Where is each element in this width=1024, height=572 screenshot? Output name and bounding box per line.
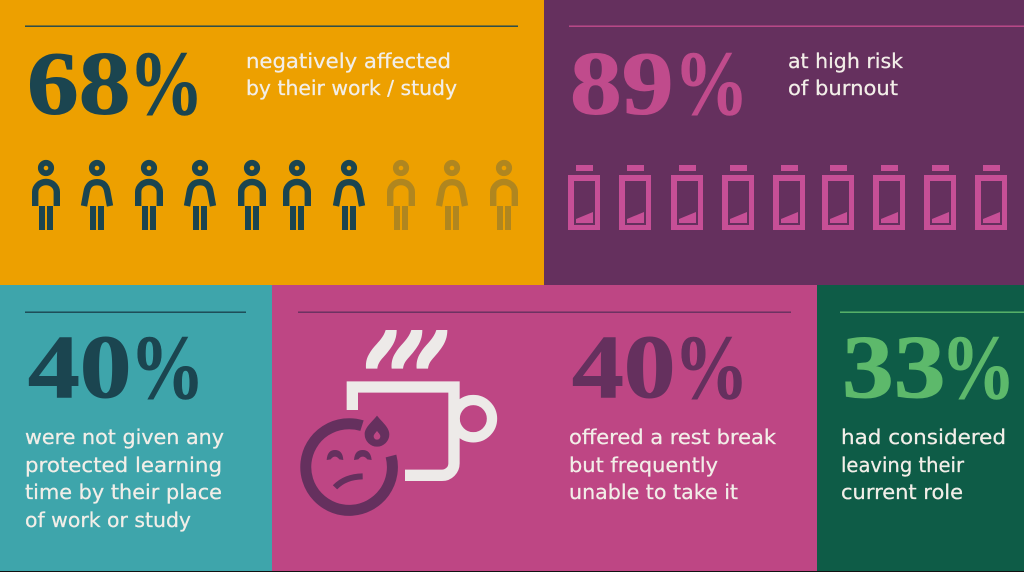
icon: steam xyxy=(366,330,447,369)
text: had considered leaving xyxy=(841,425,1006,504)
panel: 68% negatively affected xyxy=(0,0,544,285)
text: offered a rest break: offered a rest break xyxy=(569,425,776,449)
text: had considered leaving: had considered xyxy=(841,425,1006,449)
stat: 40%: 40 xyxy=(28,317,131,416)
text: negatively affected xyxy=(246,49,457,100)
stat: 40%: 40 xyxy=(572,317,675,416)
stat: 89%: % xyxy=(674,33,749,135)
panel: 89% burnout xyxy=(544,0,1024,285)
text: protected learning: were not given any xyxy=(25,425,224,449)
text: offered a rest break xyxy=(569,425,776,504)
stat: 33%: % xyxy=(941,317,1016,419)
stat: 40% xyxy=(572,317,749,419)
text: had considered leaving: current role xyxy=(841,480,963,504)
text: had considered leaving: leaving their xyxy=(841,453,965,477)
stat: 33% xyxy=(842,317,1016,419)
text: at high risk of burnout: at high risk xyxy=(788,49,903,73)
stat: 40%: % xyxy=(130,317,205,419)
text: protected learning xyxy=(25,425,224,532)
stat: 68%: 68 xyxy=(27,34,130,133)
icon row: ten people, seven highlighted xyxy=(35,163,515,230)
stat: 33%: 33 xyxy=(842,317,945,416)
text: negatively affected: by their work / study xyxy=(246,76,457,100)
text: protected learning: protected learning xyxy=(25,453,222,477)
text: offered a rest break: but frequently xyxy=(569,453,718,477)
stat: 40%: % xyxy=(674,317,749,419)
icon row: nine low batteries xyxy=(568,165,1007,230)
panel: 40% no protected learning time xyxy=(0,285,272,571)
stat: 68%: % xyxy=(129,33,204,135)
text: negatively affected: negatively affected xyxy=(246,49,451,73)
text: protected learning: time by their place xyxy=(25,480,222,504)
stat: 40% xyxy=(28,317,205,419)
icon: steaming cup with sad sweating face xyxy=(306,330,492,510)
stat: 68% xyxy=(27,33,204,135)
icon: cup xyxy=(352,387,492,475)
text: protected learning: of work or study xyxy=(25,508,191,532)
stat: 89% xyxy=(570,33,749,135)
icon: sad face with sweat drop xyxy=(306,416,392,510)
text: at high risk of burnout xyxy=(788,49,903,100)
panel: 40% rest break xyxy=(272,285,817,571)
stat: 89%: 89 xyxy=(570,34,673,133)
panel: 33% considered leaving xyxy=(817,285,1024,571)
text: offered a rest break: unable to take it xyxy=(569,480,738,504)
text: at high risk of burnout: of burnout xyxy=(788,76,898,100)
